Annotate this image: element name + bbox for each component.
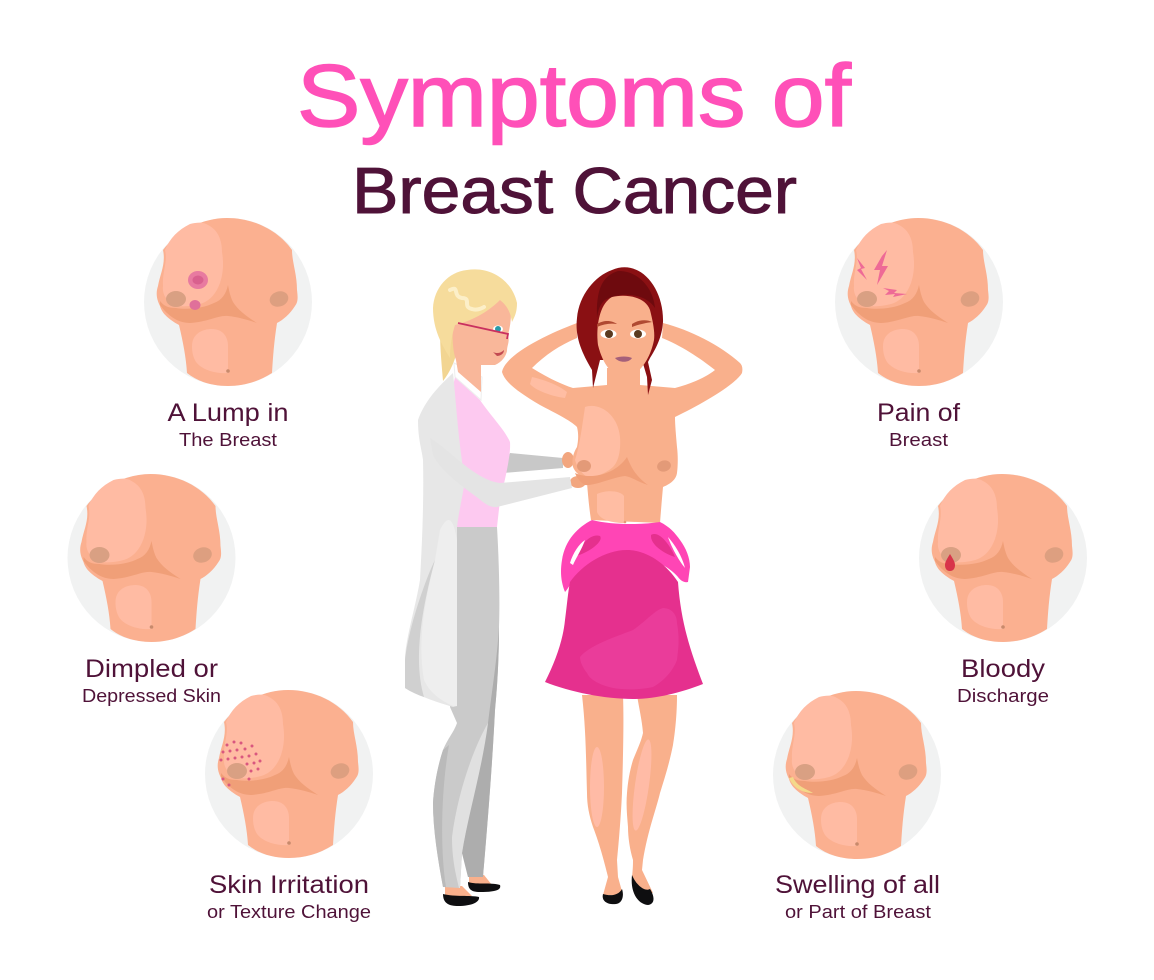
label: A Lump in The Breast <box>168 399 288 450</box>
panel: dimpled or depressed skin <box>68 474 236 706</box>
label: Swelling of all or Part of Breast: or Part of Breast <box>785 902 931 922</box>
patient legs <box>582 695 677 895</box>
patient body and arms <box>502 323 742 523</box>
illustration: patient <box>502 267 742 905</box>
label: Bloody Discharge <box>957 655 1049 706</box>
icon: torso with lump <box>144 218 312 386</box>
panel: pain of breast <box>835 218 1003 450</box>
label: Swelling of all or Part of Breast <box>775 871 940 922</box>
doctor hands <box>562 452 586 488</box>
label: Swelling of all or Part of Breast: Swelling of all <box>775 871 940 899</box>
doctor far sleeve <box>503 453 563 473</box>
doctor trousers <box>433 527 499 888</box>
skirt highlight <box>580 608 679 689</box>
patient mouth <box>615 356 632 362</box>
label: Bloody Discharge: Discharge <box>957 686 1049 706</box>
skirt body <box>545 550 703 699</box>
label: Dimpled or Depressed Skin: Depressed Skin <box>82 686 221 706</box>
label: Dimpled or Depressed Skin: Dimpled or <box>85 655 218 683</box>
illustration: doctor <box>405 269 586 906</box>
label: Pain of Breast: Pain of <box>877 399 960 427</box>
label: Bloody Discharge: Bloody <box>961 655 1046 683</box>
label: Skin Irritation or Texture Change: or Texture Change <box>207 902 371 922</box>
label: A Lump in The Breast: The Breast <box>179 430 277 450</box>
patient hair top <box>597 271 655 318</box>
heading: Breast Cancer: Breast Cancer <box>352 154 797 227</box>
doctor ankles <box>445 875 492 896</box>
icon: torso with skin irritation dots <box>205 690 373 858</box>
doctor trouser shading <box>433 627 499 888</box>
leg highlights <box>590 738 655 832</box>
panel: a lump in the breast <box>144 218 312 450</box>
doctor shoes <box>443 882 500 906</box>
skirt waistband <box>561 520 690 592</box>
panel: skin irritation or texture change <box>205 690 373 922</box>
label: Skin Irritation or Texture Change <box>207 871 371 922</box>
doctor collar <box>454 363 482 400</box>
icon: torso with pain bolts <box>835 218 1003 386</box>
doctor coat shading <box>405 520 457 706</box>
patient eyes <box>600 330 646 338</box>
doctor glasses <box>458 323 508 339</box>
doctor neck and face <box>453 295 511 392</box>
panel: swelling of all or part of breast <box>773 691 941 922</box>
skirt panels <box>570 534 685 568</box>
title <box>297 46 852 227</box>
icon: torso with dimpled skin <box>68 474 236 642</box>
icon: torso with blood drop <box>919 474 1087 642</box>
heading: Symptoms of: Symptoms of <box>297 46 852 145</box>
doctor lab coat <box>405 373 465 707</box>
patient under-chest fold <box>575 457 648 485</box>
label: Pain of Breast <box>877 399 960 450</box>
label: Skin Irritation or Texture Change: Skin Irritation <box>209 871 369 899</box>
doctor ponytail <box>440 320 458 381</box>
patient shading marks <box>577 459 672 523</box>
doctor eye <box>493 326 503 332</box>
doctor hair <box>433 269 517 358</box>
patient hair back <box>577 267 663 395</box>
patient skin highlights <box>530 377 624 523</box>
label: A Lump in The Breast: A Lump in <box>168 399 288 427</box>
icon: torso with swelling <box>773 691 941 859</box>
panel: bloody discharge <box>919 474 1087 706</box>
label: Pain of Breast: Breast <box>889 430 948 450</box>
doctor mouth <box>493 350 504 356</box>
patient shoes <box>603 875 654 905</box>
doctor hair highlight <box>450 289 484 310</box>
doctor near sleeve <box>430 438 572 507</box>
patient brows <box>597 320 652 327</box>
doctor pink top <box>450 377 510 527</box>
label: Dimpled or Depressed Skin <box>82 655 221 706</box>
patient face <box>597 296 654 377</box>
